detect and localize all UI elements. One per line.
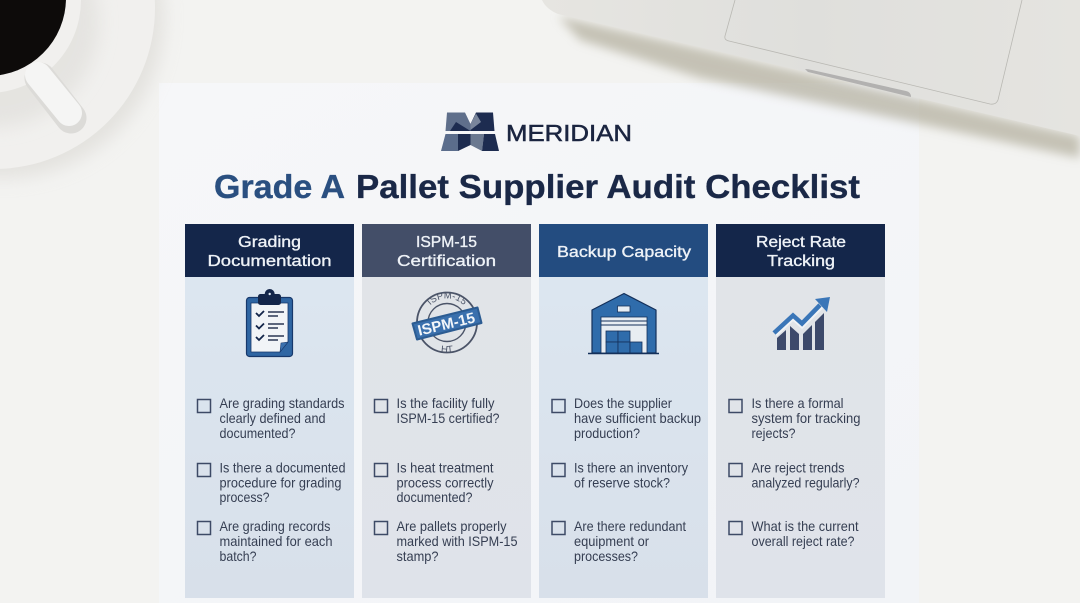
column body bbox=[539, 277, 708, 598]
panel: ISPM-15 Certification bbox=[362, 224, 531, 598]
logo mark bbox=[441, 112, 499, 151]
column header bbox=[539, 224, 708, 277]
checklist items: Is there an inventory bbox=[574, 460, 688, 476]
column header: Tracking bbox=[767, 253, 835, 270]
checklist items: clearly defined and bbox=[220, 411, 326, 426]
checklist items: Are pallets properly bbox=[396, 519, 507, 534]
icon: ISPM-15 stamp: ISPM-15 bbox=[428, 292, 466, 305]
checklist items: overall reject rate? bbox=[752, 534, 855, 549]
checklist items: analyzed regularly? bbox=[752, 476, 860, 490]
checklist items: What is the current bbox=[752, 519, 859, 534]
checklist items: documented? bbox=[220, 426, 296, 441]
column body bbox=[716, 277, 885, 598]
checklist items: process correctly bbox=[396, 476, 494, 490]
checklist items: Are grading standards bbox=[220, 396, 345, 411]
checklist items: marked with ISPM-15 bbox=[396, 534, 518, 549]
checklist items: Are grading records bbox=[220, 519, 331, 534]
panel: Backup Capacity bbox=[539, 224, 708, 598]
checklist items bbox=[198, 396, 346, 564]
coffee cup on saucer bbox=[0, 0, 164, 178]
checklist items: production? bbox=[574, 426, 640, 441]
cup handle bbox=[38, 75, 71, 118]
icon: warehouse bbox=[588, 294, 659, 354]
checklist items: processes? bbox=[574, 549, 638, 564]
checklist items bbox=[374, 396, 518, 564]
checklist items: have sufficient backup bbox=[574, 411, 701, 426]
column header: Documentation bbox=[208, 253, 332, 270]
icon: rising bar chart bbox=[774, 297, 830, 350]
checklist items: of reserve stock? bbox=[574, 476, 670, 490]
column header: Certification bbox=[397, 253, 496, 270]
checklist items: Is there a documented bbox=[220, 460, 346, 476]
column header: Reject Rate bbox=[756, 234, 846, 251]
column header: ISPM-15 bbox=[416, 234, 477, 251]
title: Grade A bbox=[214, 168, 345, 205]
column header bbox=[185, 224, 354, 277]
paper sheet bbox=[159, 83, 919, 603]
column body bbox=[185, 277, 354, 598]
checklist items: rejects? bbox=[752, 426, 796, 441]
checklist items: procedure for grading bbox=[220, 476, 342, 490]
checklist items: system for tracking bbox=[752, 411, 860, 426]
checklist items bbox=[552, 396, 701, 564]
logo: Meridian bbox=[441, 112, 632, 151]
checklist items: maintained for each bbox=[220, 534, 332, 549]
checklist items: Are there redundant bbox=[574, 519, 686, 534]
icon: clipboard bbox=[246, 289, 292, 356]
title: Pallet Supplier Audit Checklist bbox=[356, 168, 860, 205]
panel: Reject Rate Tracking bbox=[716, 224, 885, 598]
logo wordmark: MERIDIAN bbox=[506, 120, 632, 146]
column body bbox=[362, 277, 531, 598]
checklist items: process? bbox=[220, 490, 270, 505]
checklist items: Is heat treatment bbox=[396, 460, 494, 476]
checklist items: Does the supplier bbox=[574, 396, 672, 411]
icon: ISPM-15 stamp: ISPM-15 bbox=[416, 310, 477, 340]
column header bbox=[716, 224, 885, 277]
checklist items: Is the facility fully bbox=[396, 396, 495, 411]
checklist items: batch? bbox=[220, 549, 257, 564]
column header bbox=[362, 224, 531, 277]
checklist items: documented? bbox=[396, 490, 473, 505]
laptop corner bbox=[542, 0, 1080, 158]
checklist items: equipment or bbox=[574, 534, 649, 549]
icon: ISPM-15 stamp bbox=[412, 292, 482, 354]
checklist items: ISPM-15 certified? bbox=[396, 411, 500, 426]
panel: Grading Documentation bbox=[185, 224, 354, 598]
checklist items: Is there a formal bbox=[752, 396, 844, 411]
checklist items: Are reject trends bbox=[752, 460, 845, 476]
icon: ISPM-15 stamp: HT bbox=[442, 346, 452, 352]
column header: Grading bbox=[238, 234, 301, 251]
column header: Backup Capacity bbox=[557, 244, 691, 261]
checklist items bbox=[729, 396, 860, 549]
checklist items: stamp? bbox=[396, 549, 439, 564]
